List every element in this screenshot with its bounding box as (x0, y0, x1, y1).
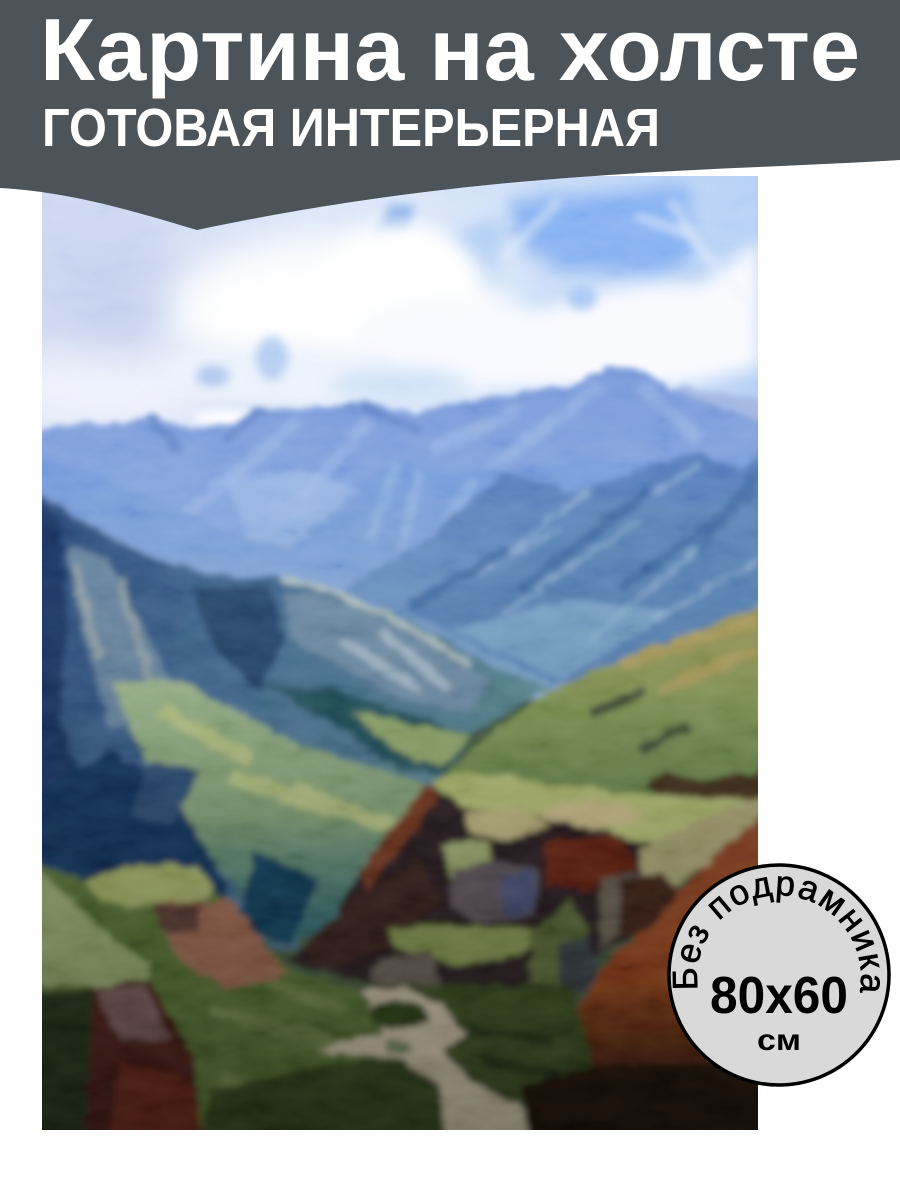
header banner (0, 0, 900, 230)
right blue ridges (340, 452, 770, 690)
dirt path (318, 988, 550, 1140)
canvas texture (42, 176, 758, 1130)
sky (42, 176, 758, 430)
title: Картина на холсте (40, 0, 860, 99)
rust foreground slope (574, 814, 758, 1072)
badge curved text: Без подрамника (672, 876, 880, 993)
left foreground hill (42, 856, 380, 1130)
far back peak (675, 386, 770, 440)
badge unit: см (757, 1024, 801, 1057)
pale right slope (634, 794, 758, 890)
badge circle (669, 865, 889, 1085)
small bush (384, 1041, 412, 1053)
left large mountain (30, 490, 553, 950)
bush on path (369, 1001, 429, 1029)
right green slope (444, 600, 770, 810)
grassy plateau (430, 772, 770, 855)
bottom vegetation (200, 985, 620, 1140)
far mountain ridge (42, 362, 758, 543)
subtitle: ГОТОВАЯ ИНТЕРЬЕРНАЯ (42, 98, 660, 158)
badge size number: 80x60 (710, 967, 848, 1025)
middle mountain range (30, 450, 770, 700)
clouds (0, 185, 760, 440)
rocky cliff (286, 782, 654, 992)
painting: mountain landscape canvas (0, 176, 770, 1140)
badge: size (667, 863, 891, 1087)
tonal shading (42, 554, 758, 1130)
dark lower right (520, 1061, 758, 1130)
base underpainting (268, 694, 702, 1010)
